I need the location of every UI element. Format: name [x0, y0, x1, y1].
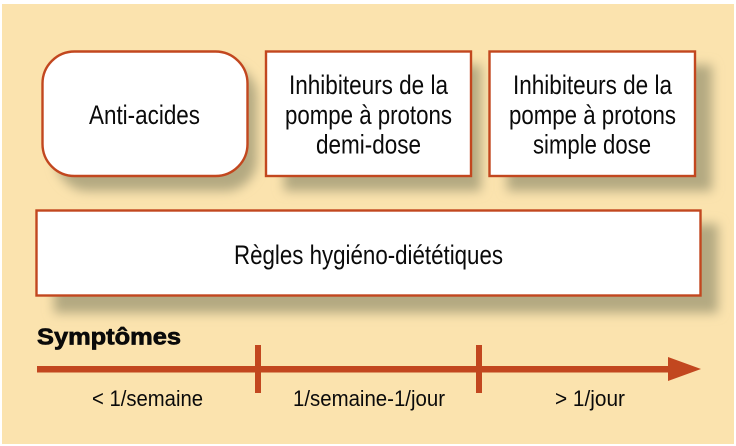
label: half-dose PPI: Inhibiteurs de la	[289, 70, 449, 100]
label: more than once a day: > 1/jour	[555, 386, 625, 411]
label: once a week to once a day: 1/semaine-1/jour	[293, 386, 445, 411]
arrow: symptom frequency axis	[37, 345, 701, 393]
panel: half-dose PPI	[266, 52, 481, 191]
label: half-dose PPI: pompe à protons	[285, 100, 452, 130]
label: anti-acids: Anti-acides	[89, 100, 200, 130]
panel: anti-acids	[42, 52, 257, 191]
label: full-dose PPI: pompe à protons	[509, 100, 676, 130]
panel: full-dose PPI	[490, 52, 712, 191]
label: less than once a week: < 1/semaine	[92, 386, 203, 411]
label: full-dose PPI	[509, 70, 676, 160]
label: full-dose PPI: simple dose	[533, 130, 651, 160]
label: full-dose PPI: Inhibiteurs de la	[513, 70, 673, 100]
panel: lifestyle rules	[36, 210, 718, 313]
label: lifestyle rules: Règles hygiéno-diététiques	[234, 240, 503, 270]
label: half-dose PPI: demi-dose	[316, 130, 421, 160]
heading: symptoms: Symptômes	[37, 324, 181, 350]
label: half-dose PPI	[285, 70, 452, 160]
